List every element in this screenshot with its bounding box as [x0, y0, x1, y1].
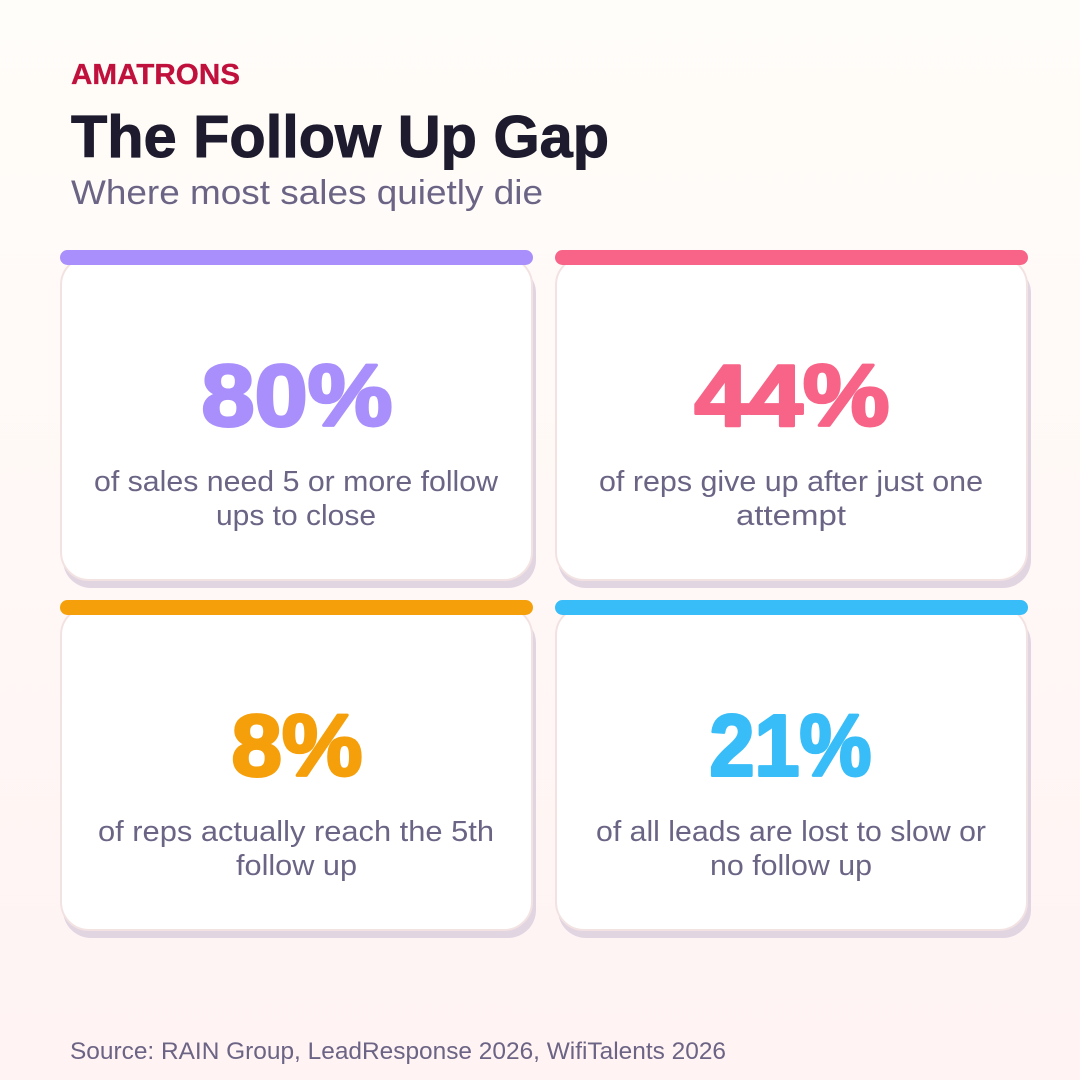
- description: 44%: attempt: [736, 500, 846, 532]
- panel: 80 percent stat: [60, 250, 536, 588]
- description: 44%: of reps give up after just one: [599, 466, 983, 498]
- stat number: 44%: 44%: [694, 348, 890, 444]
- panel: 44 percent stat: [555, 250, 1031, 588]
- brand label: AMATRONS: [71, 59, 240, 91]
- source note: Source: RAIN Group, LeadResponse 2026, WifiTalents 2026: [70, 1038, 726, 1065]
- panel: 8 percent stat: [60, 600, 536, 938]
- title: The Follow Up Gap: [71, 104, 609, 170]
- subtitle: Where most sales quietly die: [71, 174, 543, 212]
- panel: 21 percent stat: [555, 600, 1031, 938]
- description: 21%: no follow up: [710, 850, 872, 882]
- stat number: 8%: 8%: [232, 698, 362, 794]
- stat number: 21%: 21%: [710, 698, 872, 794]
- stat number: 80%: 80%: [202, 348, 392, 444]
- description: 80%: of sales need 5 or more follow: [94, 466, 499, 498]
- description: 80%: ups to close: [216, 500, 376, 532]
- description: 21%: of all leads are lost to slow or: [596, 816, 986, 848]
- description: 8%: follow up: [236, 850, 357, 882]
- description: 8%: of reps actually reach the 5th: [98, 816, 494, 848]
